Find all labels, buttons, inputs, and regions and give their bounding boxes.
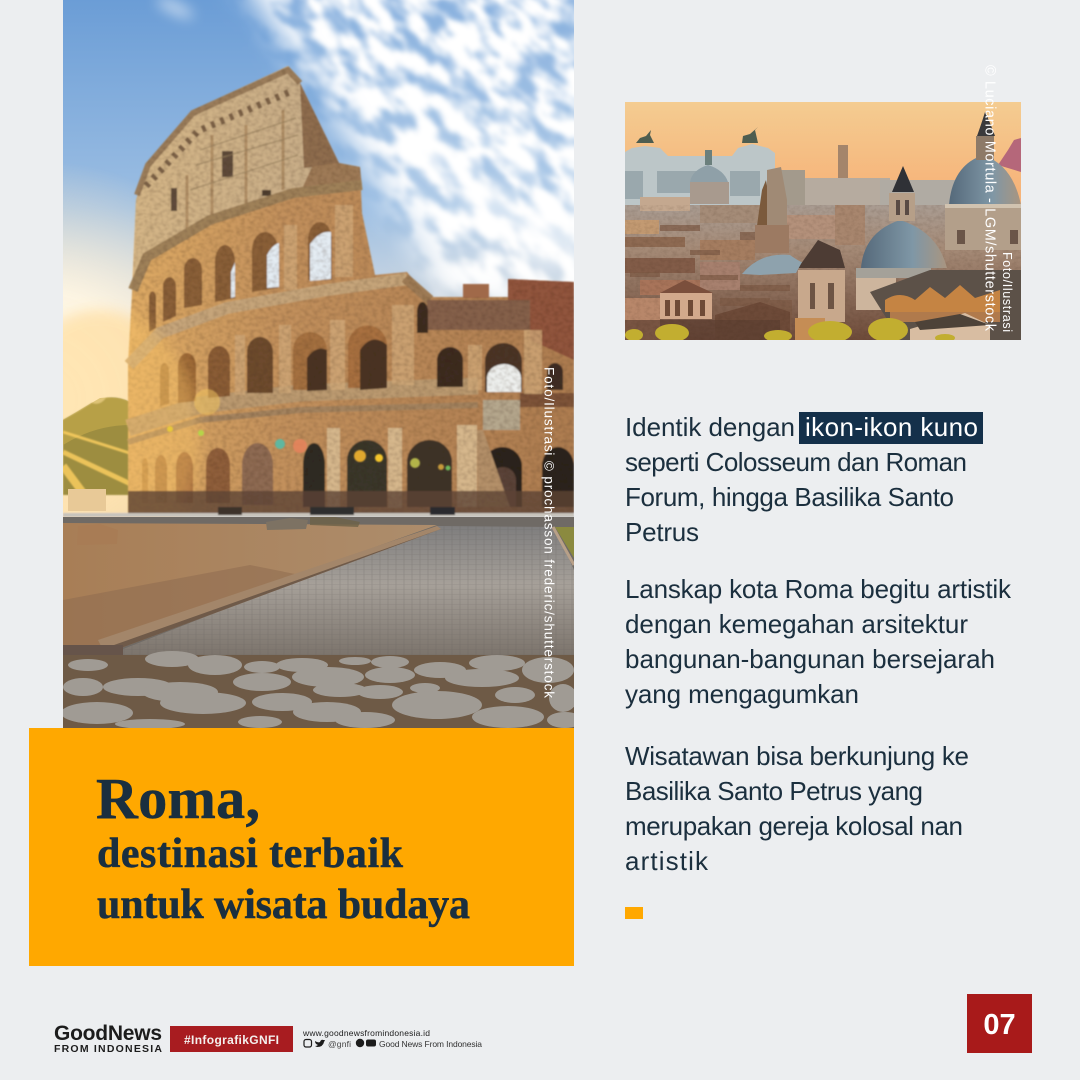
distant monument [625, 127, 775, 208]
orange rooftops [870, 270, 1021, 340]
third cornice [129, 279, 407, 365]
attic dark side [300, 83, 339, 168]
footer: hashtag tag [170, 1026, 293, 1052]
warm sun wash [63, 304, 204, 517]
amphitheatre walls [63, 65, 574, 517]
small domed temple and dome [660, 255, 802, 319]
fourth cornice [128, 386, 478, 428]
middle arches [160, 302, 563, 406]
text block: paragraph two: dengan kemegahan arsitektur [625, 609, 968, 639]
text block: paragraph one: seperti Colosseum dan Roman [625, 447, 967, 477]
trees at left [63, 396, 129, 511]
footer: logo [54, 1022, 162, 1055]
paving stones [61, 651, 583, 729]
lower columns [327, 425, 477, 508]
middle piers [235, 205, 542, 395]
text block: paragraph two: bangunan-bangunan bersejarah [625, 644, 995, 674]
heading text: Roma, [96, 766, 260, 831]
heading text: destinasi terbaik [97, 831, 404, 877]
text block: paragraph one: Forum, hingga Basilika Santo [625, 482, 954, 512]
trees along the bottom [625, 318, 955, 340]
footer: hashtag tag: #InfografikGNFI [184, 1033, 279, 1047]
footer: logo: GoodNews [54, 1022, 162, 1045]
icon: facebook [356, 1039, 364, 1047]
icon: youtube [366, 1040, 376, 1046]
sunset sky [625, 102, 1021, 204]
far buildings and tower [782, 145, 955, 205]
text block: paragraph three: artistik [625, 846, 709, 876]
lower arches [142, 440, 574, 507]
text block: paragraph three [625, 741, 969, 876]
upper arches [149, 222, 332, 332]
photo: Colosseum [63, 0, 574, 728]
lens flares [167, 389, 450, 470]
text block: paragraph two [625, 574, 1012, 709]
text block: paragraph one [625, 412, 983, 547]
right brick wall [508, 279, 574, 360]
stone texture [128, 60, 574, 520]
footer: social links [302, 1028, 482, 1049]
ground: asphalt, sand, cobblestones [63, 517, 574, 728]
text block: paragraph three: Wisatawan bisa berkunjung ke [625, 741, 969, 771]
footer: social links: Good News From Indonesia [379, 1039, 482, 1049]
credit: skyline photographer: © Luciano Mortula - LGM/shutterstock [982, 65, 998, 332]
top attic storey [133, 66, 312, 275]
footer: social links: @gnfi [328, 1039, 351, 1049]
credit: Colosseum photo: Foto/Ilustrasi © prochasson frederic/shutterstock [542, 367, 556, 698]
panel: title [29, 728, 574, 966]
footer: logo: FROM INDONESIA [54, 1043, 162, 1055]
credit: skyline photo inside: Foto/Ilustrasi [1000, 252, 1014, 332]
photo: Rome skyline [625, 102, 1021, 343]
page number badge [967, 994, 1032, 1053]
second cornice [133, 185, 362, 290]
text block: paragraph one: Identik dengan [625, 412, 795, 442]
page number badge: 07 [983, 1009, 1016, 1041]
heading text: untuk wisata budaya [97, 882, 470, 928]
highlight: ikon-ikon kuno: ikon-ikon kuno [805, 412, 978, 442]
towers and belfry [755, 167, 845, 340]
icon: instagram [304, 1040, 312, 1047]
text block: paragraph two: yang mengagumkan [625, 679, 859, 709]
text block: paragraph three: Basilika Santo Petrus yang [625, 776, 923, 806]
fence and barrier [128, 491, 574, 513]
heading text [96, 766, 470, 928]
city rooftops [625, 197, 1021, 340]
footer: social links: www.goodnewsfromindonesia.id [302, 1028, 430, 1038]
sky with clouds [63, 0, 574, 517]
orange accent square [625, 907, 643, 919]
attic windows and pilasters [222, 151, 233, 177]
attic cornice [137, 70, 300, 195]
icon: twitter [315, 1040, 325, 1047]
large dome centre [856, 166, 947, 310]
large dome right [945, 112, 1021, 250]
text block: paragraph three: merupakan gereja kolosal nan [625, 811, 963, 841]
text block: paragraph one: Petrus [625, 517, 699, 547]
text block: paragraph two: Lanskap kota Roma begitu artistik [625, 574, 1012, 604]
